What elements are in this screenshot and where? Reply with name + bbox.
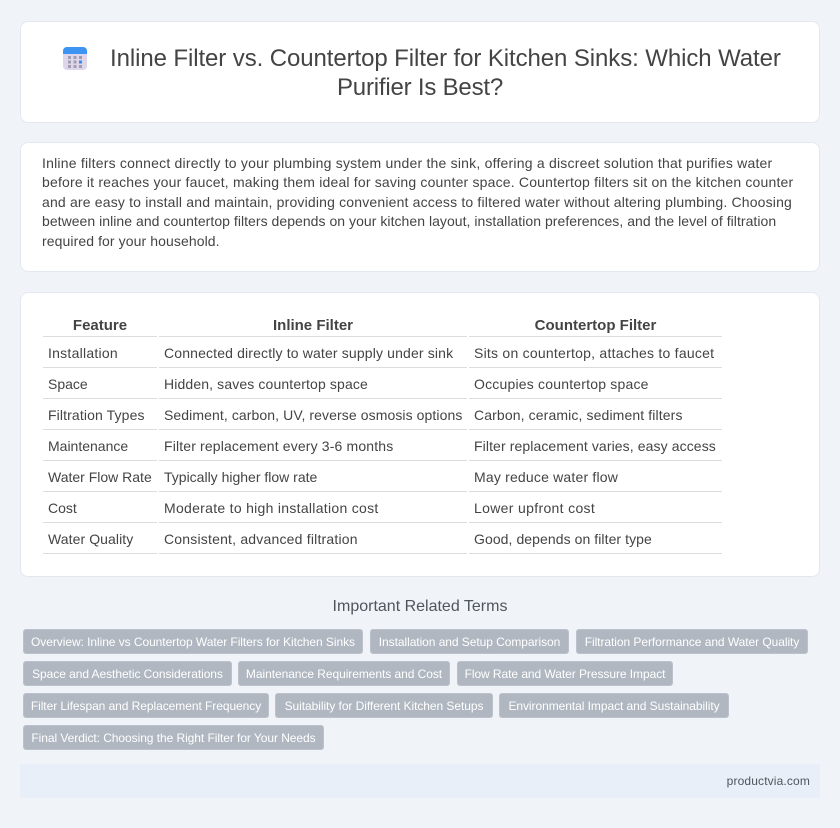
table rows: Water Flow Rate — [48, 469, 152, 485]
table rows: Moderate to high installation cost — [164, 500, 379, 516]
table header — [73, 317, 656, 334]
table rows: Installation — [48, 345, 118, 361]
table rows: Space — [48, 376, 88, 392]
related term tags: Filtration Performance and Water Quality — [585, 635, 799, 649]
related term tags: Installation and Setup Comparison — [379, 635, 560, 649]
text block: introduction: and are easy to install and maintain, providing convenient access to filtered water without altering plumbing. Choosing — [42, 194, 792, 210]
table rows: Consistent, advanced filtration — [164, 531, 358, 547]
table header: Feature — [73, 317, 127, 334]
footer — [20, 764, 820, 798]
table rows: Carbon, ceramic, sediment filters — [474, 407, 683, 423]
related term tags: Final Verdict: Choosing the Right Filter for Your Needs — [31, 731, 316, 745]
footer source text: productvia.com — [727, 774, 810, 788]
table rows: Lower upfront cost — [474, 500, 595, 516]
heading: related terms: Important Related Terms — [333, 598, 507, 615]
table rows: Cost — [48, 500, 77, 516]
table rows: Filter replacement every 3-6 months — [164, 438, 393, 454]
panel: comparison table — [20, 292, 820, 577]
table rows: Sediment, carbon, UV, reverse osmosis options — [164, 407, 462, 423]
text block: introduction: before it reaches your faucet, making them ideal for saving counter space. Countertop filters sit on the kitchen counter — [42, 174, 793, 190]
panel: title card — [20, 21, 820, 123]
text block: introduction: required for your household. — [42, 233, 220, 249]
table header: Inline Filter — [273, 317, 353, 334]
panel: introduction — [20, 142, 820, 272]
table rows: Good, depends on filter type — [474, 531, 652, 547]
table rows: May reduce water flow — [474, 469, 618, 485]
table rows: Sits on countertop, attaches to faucet — [474, 345, 714, 361]
table header: Countertop Filter — [535, 317, 656, 334]
table rows: Typically higher flow rate — [164, 469, 317, 485]
related term tags: Space and Aesthetic Considerations — [32, 667, 223, 681]
related term tags: Flow Rate and Water Pressure Impact — [465, 667, 665, 681]
table rows: Maintenance — [48, 438, 128, 454]
title: Purifier Is Best? — [337, 74, 503, 101]
table rows: Filter replacement varies, easy access — [474, 438, 716, 454]
title: Inline Filter vs. Countertop Filter for Kitchen Sinks: Which Water — [110, 45, 781, 72]
related term tags: Filter Lifespan and Replacement Frequency — [31, 699, 261, 713]
table rows: Hidden, saves countertop space — [164, 376, 368, 392]
related term tags: Maintenance Requirements and Cost — [246, 667, 442, 681]
text block: introduction — [42, 155, 793, 249]
table rows: Occupies countertop space — [474, 376, 649, 392]
text block: introduction: between inline and countertop filters depends on your kitchen layout, installation preferences, and the level of filtration — [42, 213, 776, 229]
related term tags: Overview: Inline vs Countertop Water Filters for Kitchen Sinks — [31, 635, 355, 649]
table rows: Connected directly to water supply under sink — [164, 345, 453, 361]
table rows: Water Quality — [48, 531, 133, 547]
related term tags: Suitability for Different Kitchen Setups — [285, 699, 483, 713]
title — [110, 45, 781, 101]
table rows — [43, 345, 722, 554]
related term tags: Environmental Impact and Sustainability — [508, 699, 720, 713]
related term tags — [23, 629, 808, 750]
text block: introduction: Inline filters connect directly to your plumbing system under the sink, offering a discreet solution that purifies water — [42, 155, 772, 171]
table rows: Filtration Types — [48, 407, 145, 423]
icon: calendar — [63, 47, 87, 70]
